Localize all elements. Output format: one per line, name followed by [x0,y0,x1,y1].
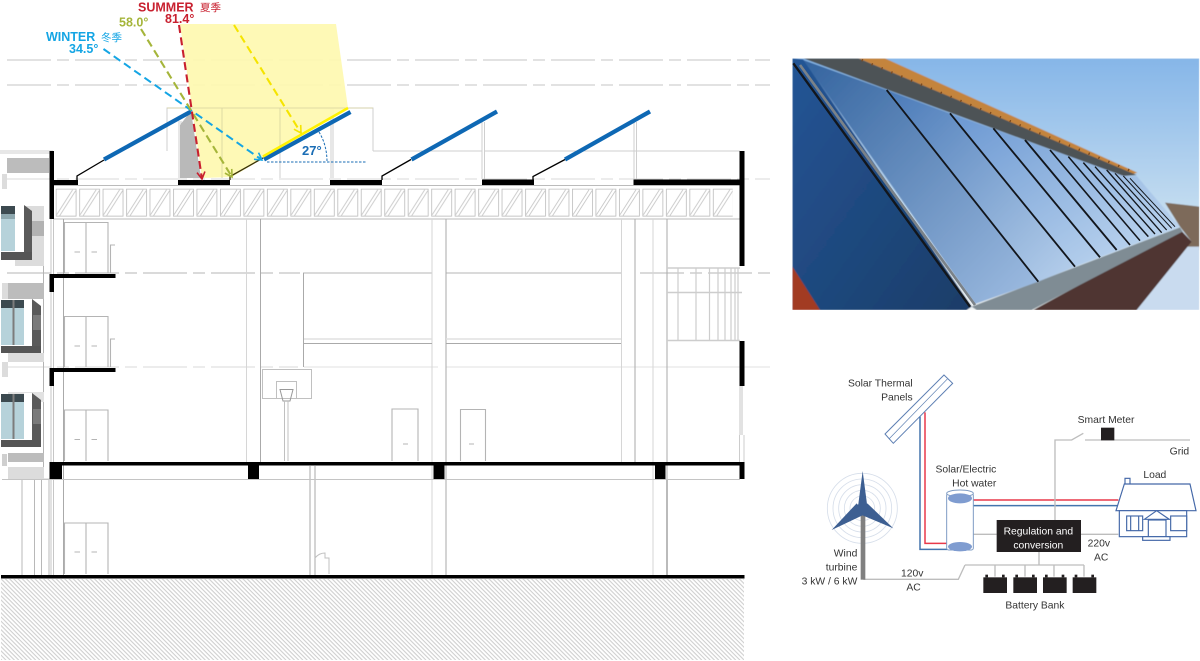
icon: smart meter [1101,428,1114,440]
ground hatch [1,579,744,660]
panel: building section drawing [0,0,770,660]
interior walls and columns [2,206,740,576]
labels: diagram captions: Smart Meter [1078,415,1135,426]
solar gain zone [180,24,348,178]
labels: diagram captions: 120v [901,569,924,580]
labels: diagram captions: Solar Thermal [848,379,913,390]
window two [1,299,41,353]
electrical wiring [863,433,1190,579]
labels: diagram captions: Grid [1170,446,1189,457]
labels: diagram captions: AC [906,582,921,593]
labels: diagram captions: Hot water [952,479,997,490]
level lines (dashed) [7,60,770,479]
basketball hoop [262,370,312,461]
label: winter [46,30,122,56]
box: regulation and conversion: conversion [1013,540,1064,551]
panel angle indicator [267,132,367,162]
icon: shaded wedge under panel [180,111,201,178]
window one [1,205,44,260]
doors [64,222,486,574]
labels: diagram captions [802,379,1189,612]
roof truss band [54,186,740,219]
box: regulation and conversion [997,520,1081,552]
label: summer: 夏季 [200,2,221,14]
label: winter: 冬季 [101,31,122,44]
labels: diagram captions: Solar/Electric [935,465,996,476]
slabs and black structure [1,151,744,578]
facade windows left [1,158,49,479]
labels: diagram captions: 3 kW / 6 kW [802,577,858,588]
labels: diagram captions: Battery Bank [1005,601,1065,612]
window wall right [667,268,742,340]
photo: solar thermal roof array [792,58,1199,310]
label: 27 degrees: 27° [302,143,322,158]
label: winter: 34.5° [69,42,98,56]
icon: battery bank [983,575,1096,593]
labels: diagram captions: Panels [881,393,913,404]
sun ray: reflected yellow [234,25,301,133]
labels: diagram captions: Wind [834,548,858,559]
small stair [315,553,329,574]
label: summer: 81.4° [165,12,194,26]
icon: hot water tank [947,490,973,551]
label: summer [138,0,221,26]
labels: diagram captions: 220v [1088,538,1111,549]
label: summer: SUMMER [138,0,194,14]
labels: diagram captions: Load [1143,470,1167,481]
roof room outlines [0,108,740,179]
sun ray: winter 34.5 degrees [104,49,262,160]
sun ray: 58 degrees [141,29,232,177]
window three [1,393,41,447]
label: winter: WINTER [46,30,95,44]
diagram: hybrid energy system [802,375,1196,612]
icon: house load [1116,478,1196,540]
sun ray: summer 81.4 degrees [179,25,202,179]
hot and cold water pipes [920,412,1118,549]
icon: solar thermal panel [885,375,953,443]
box: regulation and conversion: Regulation and [1004,526,1073,537]
icon: wind turbine [827,471,897,580]
labels: diagram captions: AC [1094,552,1109,563]
label: 58 degrees: 58.0° [119,16,148,30]
labels: diagram captions: turbine [826,562,858,573]
solar panels and inlet glazing [77,108,650,180]
